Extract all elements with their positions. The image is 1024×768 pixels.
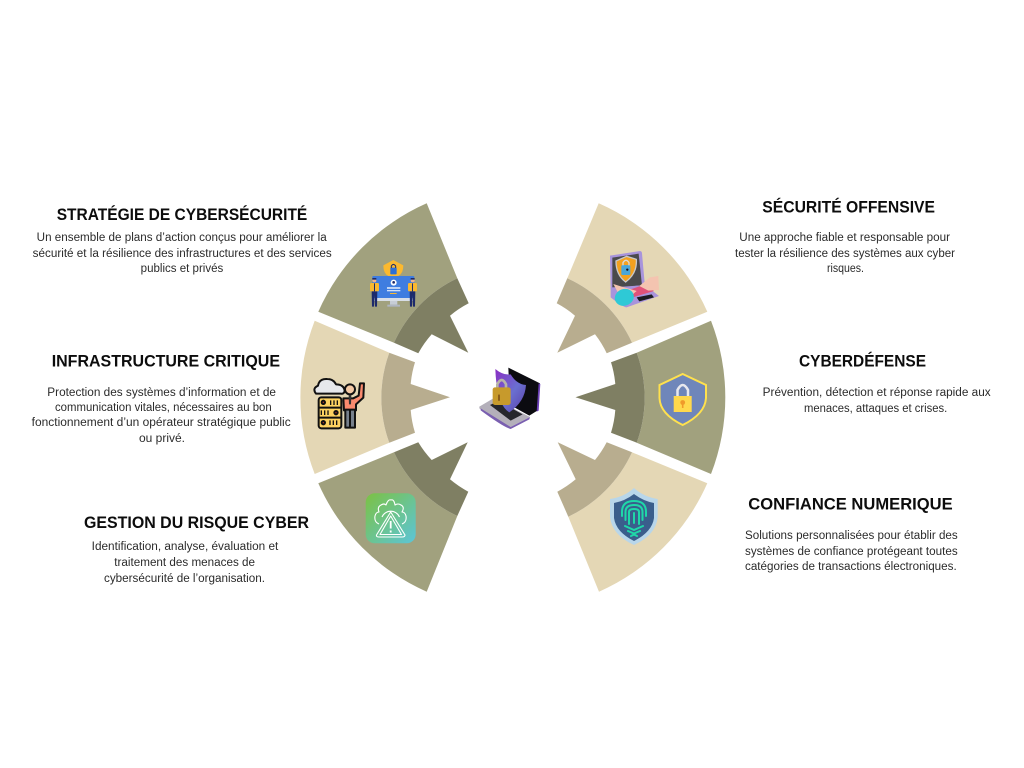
- text block: Cyberdéfense: Prévention, détection et réponse rapide aux: [763, 387, 991, 399]
- panel: segment Cyberdéfense: [576, 321, 725, 474]
- text block: Gestion du risque cyber: cybersécurité de l’organisation.: [104, 573, 265, 585]
- text block: Cyberdéfense: [763, 352, 991, 415]
- text block: Cyberdéfense: menaces, attaques et crises.: [804, 403, 947, 415]
- heading: STRATÉGIE DE CYBERSÉCURITÉ: [57, 205, 307, 224]
- icon: laptop and hands with orange shield: [610, 251, 659, 308]
- text block: Gestion du risque cyber: traitement des menaces de: [114, 557, 255, 569]
- text block: Confiance numérique: catégories de transactions électroniques.: [745, 561, 957, 573]
- text block: Infrastructure critique: communication vitales, nécessaires au bon: [55, 402, 272, 414]
- text block: Sécurité offensive: risques.: [827, 263, 864, 275]
- heading: SÉCURITÉ OFFENSIVE: [762, 198, 935, 216]
- text block: Stratégie de cybersécurité: Un ensemble de plans d’action conçus pour améliorer la: [37, 232, 327, 244]
- icon: cloud server and technician: [314, 379, 364, 428]
- text block: Confiance numérique: systèmes de confiance protégeant toutes: [745, 546, 958, 558]
- heading: CYBERDÉFENSE: [799, 352, 926, 370]
- icon: central laptop with shield and padlock: [479, 368, 540, 429]
- text block: Stratégie de cybersécurité: publics et privés: [141, 263, 224, 275]
- panel: segment Gestion du risque cyber: [318, 442, 468, 592]
- text block: Gestion du risque cyber: Identification, analyse, évaluation et: [92, 541, 279, 553]
- text block: Infrastructure critique: fonctionnement d’un opérateur stratégique public: [32, 417, 291, 429]
- icon: guards and monitor with padlock shield: [370, 260, 417, 307]
- heading: GESTION DU RISQUE CYBER: [84, 514, 309, 532]
- heading: CONFIANCE NUMERIQUE: [748, 496, 953, 514]
- panel: segment Infrastructure critique: [300, 321, 450, 474]
- text block: Stratégie de cybersécurité: [33, 205, 332, 275]
- text block: Infrastructure critique: Protection des systèmes d’information et de: [47, 387, 276, 399]
- text block: Stratégie de cybersécurité: sécurité et la résilience des infrastructures et des services: [33, 248, 332, 260]
- text block: Infrastructure critique: ou privé.: [139, 433, 185, 445]
- text block: Confiance numérique: [745, 496, 958, 573]
- text block: Sécurité offensive: tester la résilience des systèmes aux cyber: [735, 248, 955, 260]
- icon: gear and warning triangle on gradient tile: [366, 493, 416, 543]
- panel: segment Confiance numérique: [557, 442, 707, 592]
- icon: fingerprint shield: [610, 488, 658, 545]
- panel: segment Stratégie de cybersécurité: [318, 203, 469, 353]
- text block: Sécurité offensive: [735, 198, 955, 275]
- text block: Infrastructure critique: [32, 352, 291, 445]
- heading: INFRASTRUCTURE CRITIQUE: [52, 352, 280, 370]
- text block: Sécurité offensive: Une approche fiable et responsable pour: [739, 232, 950, 244]
- icon: shield with yellow padlock: [660, 374, 706, 425]
- text block: Confiance numérique: Solutions personnalisées pour établir des: [745, 530, 958, 542]
- text block: Gestion du risque cyber: [84, 514, 309, 585]
- panel: segment Sécurité offensive: [557, 203, 707, 353]
